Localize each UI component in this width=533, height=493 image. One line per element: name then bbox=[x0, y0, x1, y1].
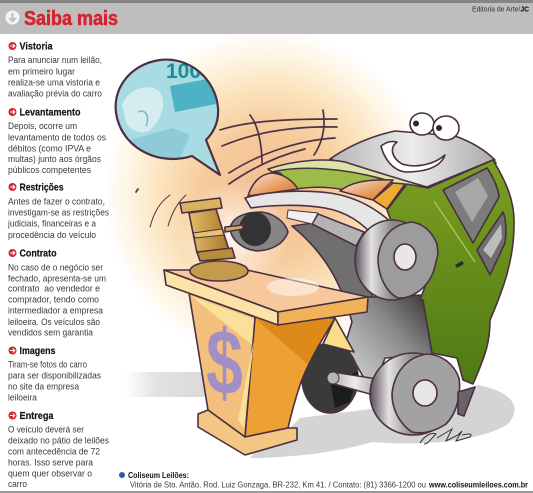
axle upper bbox=[312, 214, 364, 246]
header band bbox=[0, 0, 533, 34]
speech bubble: banknote bbox=[116, 60, 220, 175]
illustration: gavel bbox=[180, 198, 248, 281]
heading: Restrições bbox=[20, 182, 64, 194]
title: Saiba mais bbox=[24, 8, 118, 30]
hood bbox=[272, 168, 386, 190]
body text: Depois, ocorre um bbox=[8, 121, 77, 132]
eyes bbox=[410, 113, 459, 140]
podium right face bbox=[245, 317, 335, 437]
body text: contrato ao vendedor e bbox=[8, 284, 100, 294]
bullet bbox=[8, 108, 16, 116]
bullet bbox=[8, 412, 16, 420]
indicator bbox=[373, 183, 405, 209]
body text: com antecedência de 72 bbox=[8, 446, 100, 458]
section: Levantamento bbox=[8, 108, 106, 176]
body text bbox=[8, 424, 109, 490]
door handle bbox=[455, 261, 464, 268]
body text: multas) junto aos órgãos bbox=[8, 154, 101, 165]
cream trim bbox=[268, 160, 496, 192]
heading: Contrato bbox=[20, 248, 56, 260]
body text bbox=[7, 196, 109, 241]
bullet bbox=[8, 249, 16, 257]
body text: quem quer observar o bbox=[8, 468, 92, 480]
section: Vistoria bbox=[8, 42, 102, 100]
bullet bbox=[8, 346, 16, 354]
body text: deixado no pátio de leilões bbox=[8, 436, 109, 446]
heading: Vistoria bbox=[20, 42, 53, 52]
body text: realiza-se uma vistoria e bbox=[8, 78, 100, 88]
headlight right bbox=[340, 180, 393, 200]
podium base bbox=[198, 410, 297, 455]
bullet bbox=[119, 472, 125, 478]
cylinder front left bbox=[230, 212, 288, 251]
body text: Tiram-se fotos do carro bbox=[8, 360, 87, 370]
note portrait bbox=[122, 87, 163, 132]
body text bbox=[8, 121, 106, 176]
note hologram bbox=[170, 78, 216, 112]
section: Restrições bbox=[7, 182, 109, 241]
credit: Editoria de Arte/JC bbox=[472, 4, 530, 14]
rear wheel bbox=[302, 343, 377, 413]
body text: judiciais, financeiras e a bbox=[7, 218, 97, 230]
wheel upper right bbox=[355, 220, 438, 300]
car lower body bbox=[345, 295, 432, 392]
body text: públicos competentes bbox=[8, 165, 91, 176]
contact name: Coliseum Leilões: bbox=[128, 470, 189, 480]
body text: comprador, tendo como bbox=[8, 294, 99, 306]
section: Contrato bbox=[8, 248, 106, 338]
illustration: car shadow bbox=[250, 385, 515, 458]
body text: O veículo deverá ser bbox=[8, 424, 85, 436]
body text: intermediador a empresa bbox=[8, 306, 104, 316]
window small bbox=[477, 212, 506, 275]
note value: 100 bbox=[166, 60, 201, 83]
smile bbox=[381, 141, 445, 172]
body text: investigam-se as restrições bbox=[8, 208, 109, 218]
illustration: motion lines bbox=[136, 110, 337, 227]
body text: carro bbox=[8, 479, 27, 490]
body text bbox=[8, 360, 101, 404]
bumper bbox=[245, 191, 393, 240]
plate bbox=[287, 210, 318, 224]
body text: No caso de o negócio ser bbox=[8, 262, 104, 274]
body text: vendidos sem garantia bbox=[8, 328, 94, 338]
illustration: signature bbox=[420, 429, 471, 444]
wheel lower right bbox=[370, 353, 475, 435]
body text: em primeiro lugar bbox=[8, 66, 76, 78]
section: Entrega bbox=[8, 411, 109, 490]
window large bbox=[443, 168, 499, 243]
podium dollar sign: $ bbox=[206, 310, 243, 416]
body text: fechado, apresenta-se um bbox=[8, 274, 106, 284]
body text: leiloeira. Os veículos são bbox=[8, 317, 100, 328]
podium left face bbox=[189, 293, 255, 437]
heading: Levantamento bbox=[20, 108, 80, 118]
body text: procedência do veículo bbox=[8, 230, 96, 241]
podium back triangle bbox=[323, 318, 354, 352]
section: Imagens bbox=[8, 346, 101, 404]
icon: down arrow bbox=[6, 10, 20, 24]
address: Vitória de Sto. Antão, Rod. Luiz Gonzaga, BR-232, Km 41. / Contato: (81) 3366-1200 ou bbox=[130, 480, 426, 490]
body green bbox=[387, 160, 514, 384]
body text: horas. Isso serve para bbox=[8, 458, 94, 468]
illustration: podium bbox=[164, 270, 368, 455]
roof bbox=[330, 131, 495, 190]
illustration: background glow bbox=[90, 34, 440, 397]
body text: Para anunciar num leilão, bbox=[8, 55, 102, 66]
headlight left bbox=[248, 173, 298, 196]
body text: no site da empresa bbox=[8, 382, 80, 392]
podium top bbox=[164, 270, 368, 312]
body text bbox=[8, 262, 106, 338]
bullet bbox=[8, 42, 16, 50]
body text: Antes de fazer o contrato, bbox=[8, 196, 105, 208]
body text: para ser disponibilizadas bbox=[8, 370, 101, 382]
illustration: car bbox=[230, 113, 514, 435]
footer: contact bbox=[119, 470, 529, 490]
body text bbox=[8, 55, 102, 100]
body text: leiloeira bbox=[8, 392, 38, 404]
body text: avaliação prévia do carro bbox=[8, 88, 102, 100]
body text: levantamento de todos os bbox=[8, 132, 106, 144]
body text: débitos (como IPVA e bbox=[8, 144, 91, 154]
heading: Imagens bbox=[20, 346, 56, 357]
car underside bbox=[292, 222, 372, 302]
heading: Entrega bbox=[20, 411, 54, 422]
bullet bbox=[8, 183, 16, 191]
